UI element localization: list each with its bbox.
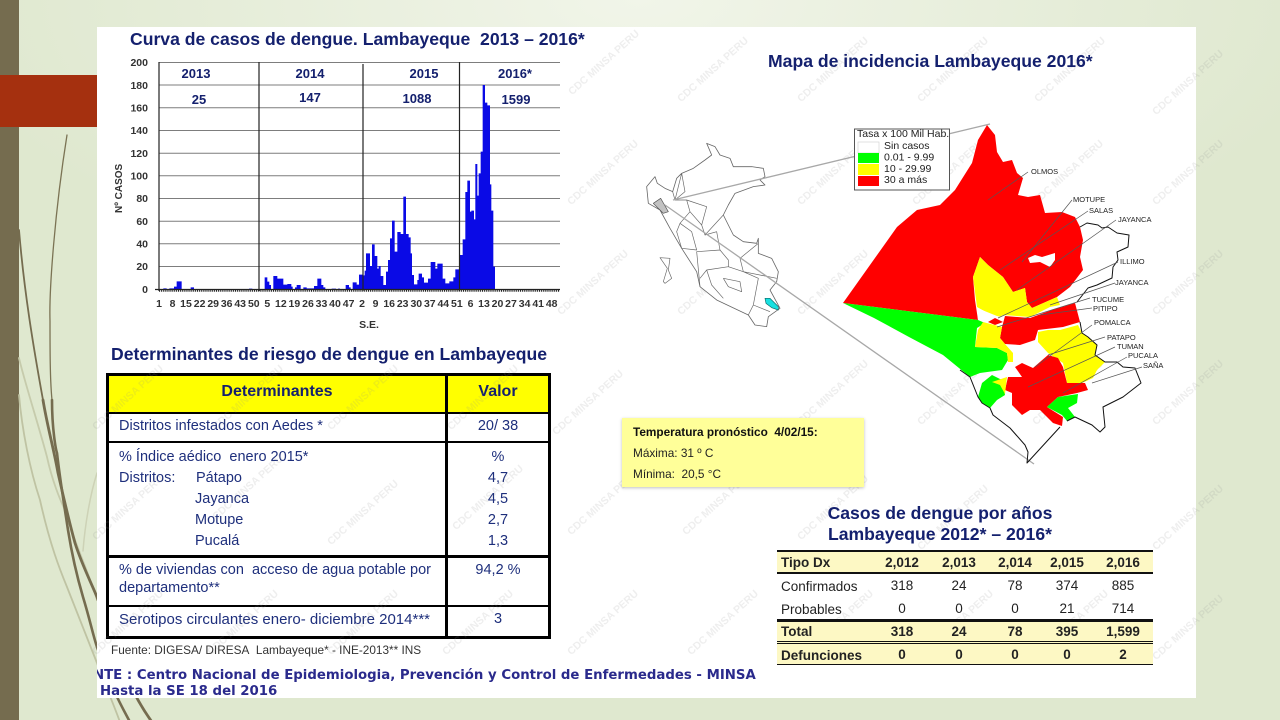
watermarks: CDC MINSA PERU xyxy=(440,588,516,658)
y axis labels: 80 xyxy=(136,193,148,205)
watermarks: CDC MINSA PERU xyxy=(920,588,996,658)
x axis week labels: 43 xyxy=(234,298,246,310)
column 2014: 0 xyxy=(1011,601,1019,616)
column 2014: 78 xyxy=(1007,578,1023,593)
watermarks: CDC MINSA PERU xyxy=(800,588,876,658)
district labels: TUMAN xyxy=(1117,342,1144,351)
x axis week labels: 48 xyxy=(546,298,558,310)
watermarks: CDC MINSA PERU xyxy=(1032,35,1108,105)
watermarks: CDC MINSA PERU xyxy=(450,463,526,533)
column 2015: 21 xyxy=(1059,601,1075,616)
column 2013: 2,013 xyxy=(942,555,976,570)
green south east xyxy=(1047,394,1078,421)
y axis labels: 20 xyxy=(136,261,148,273)
row: indice aedico: % Índice aédico enero 2015* xyxy=(119,449,308,465)
cases table heading: Casos de dengue por años xyxy=(828,503,1052,523)
district labels: MOTUPE xyxy=(1073,195,1105,204)
green coast xyxy=(843,303,1008,377)
watermarks: CDC MINSA PERU xyxy=(445,363,521,433)
column 2014: 78 xyxy=(1007,624,1023,639)
grid lines xyxy=(159,62,560,266)
Lambayeque department map xyxy=(843,125,1142,463)
watermarks: CDC MINSA PERU xyxy=(685,588,761,658)
watermarks: CDC MINSA PERU xyxy=(205,588,281,658)
year labels and totals: 2013 xyxy=(182,66,210,81)
cases table heading: Lambayeque 2012* – 2016* xyxy=(828,524,1052,544)
watermarks: CDC MINSA PERU xyxy=(1150,48,1226,118)
watermarks: CDC MINSA PERU xyxy=(1150,483,1226,553)
district labels: SALAS xyxy=(1089,206,1113,215)
x axis week labels: 33 xyxy=(316,298,327,310)
x axis week labels: 2 xyxy=(359,298,365,310)
values: indice aedico xyxy=(488,449,508,549)
x axis week labels: 34 xyxy=(519,298,531,310)
Lambayeque locator xyxy=(653,198,668,213)
row: agua potable xyxy=(119,562,431,596)
x axis title: S.E. xyxy=(359,319,379,331)
map legend: 0.01 - 9.99 xyxy=(884,152,934,164)
column 2012: 0 xyxy=(898,601,906,616)
column 2012: 318 xyxy=(891,624,913,639)
yellow east xyxy=(1038,325,1105,383)
x axis week labels: 27 xyxy=(505,298,517,310)
Peru locator map xyxy=(647,143,780,327)
column 2015: 0 xyxy=(1063,647,1071,662)
watermarks: CDC MINSA PERU xyxy=(1150,248,1226,318)
watermarks: CDC MINSA PERU xyxy=(915,248,991,318)
yellow north xyxy=(973,257,1060,318)
year labels and totals: 25 xyxy=(192,92,206,107)
map title: Mapa de incidencia Lambayeque 2016* xyxy=(768,51,1093,71)
x axis week labels: 1 xyxy=(156,298,162,310)
column 2016: 885 xyxy=(1112,578,1134,593)
green south west xyxy=(978,375,1005,408)
map legend: Tasa x 100 Mil Hab. xyxy=(857,128,949,140)
watermarks: CDC MINSA PERU xyxy=(1150,593,1226,663)
x axis week labels: 16 xyxy=(383,298,395,310)
source note: Fuente: DIGESA/ DIRESA Lambayeque* - INE-2013** INS xyxy=(111,643,421,657)
x axis week labels xyxy=(156,298,558,310)
row: indice aedico: Jayanca xyxy=(195,491,249,507)
row: indice aedico xyxy=(119,448,308,549)
y axis labels: 180 xyxy=(130,80,148,92)
island outline xyxy=(660,258,672,283)
map legend: Sin casos xyxy=(884,140,930,152)
callout heading: Temperatura pronóstico 4/02/15: xyxy=(633,425,818,439)
x axis week labels: 36 xyxy=(221,298,233,310)
column 2016: 2 xyxy=(1119,647,1127,662)
column 2013 xyxy=(942,555,976,662)
determinants heading: Determinantes de riesgo de dengue en Lambayeque xyxy=(111,344,547,364)
case bars xyxy=(163,85,495,290)
red central xyxy=(1000,303,1080,345)
column 2013: 0 xyxy=(955,601,963,616)
x axis week labels: 40 xyxy=(329,298,341,310)
row labels: Tipo Dx xyxy=(781,555,830,570)
watermarks: CDC MINSA PERU xyxy=(675,248,751,318)
y axis labels: 60 xyxy=(136,216,148,228)
row labels: Probables xyxy=(781,602,842,617)
watermarks: CDC MINSA PERU xyxy=(795,248,871,318)
x axis week labels: 23 xyxy=(397,298,409,310)
column 2013: 24 xyxy=(951,624,967,639)
watermarks: CDC MINSA PERU xyxy=(325,363,401,433)
callout lines xyxy=(665,124,1034,464)
maximum temperature: Máxima: 31 º C xyxy=(633,446,713,460)
red south xyxy=(1005,355,1088,426)
year labels and totals: 1088 xyxy=(403,91,431,106)
yellow south xyxy=(992,377,1007,394)
watermarks: CDC MINSA PERU xyxy=(210,363,286,433)
row: indice aedico: Motupe xyxy=(195,512,243,528)
x axis week labels: 26 xyxy=(302,298,314,310)
district labels: TUCUME xyxy=(1092,295,1124,304)
temperature callout xyxy=(622,418,864,487)
y axis labels xyxy=(130,57,148,296)
value: 20/38: 20/ 38 xyxy=(478,418,518,434)
values: indice aedico: 4,5 xyxy=(488,491,508,507)
row: agua potable: % de viviendas con acceso de agua potable por xyxy=(119,562,431,578)
watermarks: CDC MINSA PERU xyxy=(565,588,641,658)
x axis week labels: 41 xyxy=(532,298,544,310)
column 2012: 0 xyxy=(898,647,906,662)
watermarks: CDC MINSA PERU xyxy=(915,358,991,428)
x axis week labels: 50 xyxy=(248,298,260,310)
watermarks: CDC MINSA PERU xyxy=(795,358,871,428)
left brown band xyxy=(0,0,19,720)
map legend: 10 - 29.99 xyxy=(884,163,931,175)
y axis labels: 160 xyxy=(130,102,148,114)
determinants table xyxy=(106,373,551,639)
red small xyxy=(988,318,1003,325)
district labels xyxy=(1031,167,1163,370)
x axis week labels: 5 xyxy=(264,298,270,310)
x axis week labels: 8 xyxy=(170,298,176,310)
y axis labels: 140 xyxy=(130,125,148,137)
watermarks: CDC MINSA PERU xyxy=(90,363,166,433)
x axis week labels: 44 xyxy=(437,298,449,310)
row labels: Defunciones xyxy=(781,648,862,663)
column 2016: 714 xyxy=(1112,601,1134,616)
column divider xyxy=(445,376,448,636)
column 2016: 1,599 xyxy=(1106,624,1140,639)
map legend: 30 a más xyxy=(884,174,927,186)
column 2014 xyxy=(998,555,1032,662)
white districts xyxy=(1057,217,1129,305)
year labels and totals: 2015 xyxy=(410,66,438,81)
x axis week labels: 47 xyxy=(343,298,355,310)
row divider 3 xyxy=(109,605,548,607)
row: indice aedico: Pucalá xyxy=(195,533,239,549)
footer source xyxy=(97,668,756,698)
y axis labels: 40 xyxy=(136,238,148,250)
y axis labels: 200 xyxy=(130,57,148,69)
district labels: POMALCA xyxy=(1094,318,1131,327)
watermarks: CDC MINSA PERU xyxy=(1030,138,1106,208)
x axis week labels: 9 xyxy=(373,298,379,310)
x axis week labels: 19 xyxy=(289,298,300,310)
minimum temperature: Mínima: 20,5 °C xyxy=(633,467,721,481)
watermarks: CDC MINSA PERU xyxy=(915,483,991,553)
value: 94,2 %: 94,2 % xyxy=(475,562,521,578)
watermarks: CDC MINSA PERU xyxy=(1030,358,1106,428)
map legend xyxy=(854,128,950,190)
column 2016 xyxy=(1106,555,1140,662)
watermarks: CDC MINSA PERU xyxy=(1150,138,1226,208)
column 2015 xyxy=(1050,555,1084,662)
watermarks: CDC MINSA PERU xyxy=(915,35,991,105)
watermarks: CDC MINSA PERU xyxy=(565,468,641,538)
column 2012: 318 xyxy=(891,578,913,593)
watermarks: CDC MINSA PERU xyxy=(795,473,871,543)
row labels: Confirmados xyxy=(781,579,858,594)
white hole xyxy=(1028,253,1055,267)
x axis week labels: 30 xyxy=(410,298,422,310)
watermarks: CDC MINSA PERU xyxy=(90,473,166,543)
column 2013: 24 xyxy=(951,578,967,593)
watermarks: CDC MINSA PERU xyxy=(565,138,641,208)
column 2015: 395 xyxy=(1056,624,1078,639)
column 2015: 2,015 xyxy=(1050,555,1084,570)
x axis week labels: 22 xyxy=(194,298,206,310)
watermarks: CDC MINSA PERU xyxy=(795,138,871,208)
watermarks: CDC MINSA PERU xyxy=(566,28,642,98)
total band xyxy=(777,619,1153,644)
x axis week labels: 37 xyxy=(424,298,436,310)
year labels and totals: 2016* xyxy=(498,66,533,81)
table header xyxy=(109,376,548,414)
row: serotipos: Serotipos circulantes enero- diciembre 2014*** xyxy=(119,611,430,628)
watermarks: CDC MINSA PERU xyxy=(325,588,401,658)
x axis week labels: 12 xyxy=(275,298,287,310)
district labels: SAÑA xyxy=(1143,361,1163,370)
watermarks: CDC MINSA PERU xyxy=(90,588,166,658)
district leader lines xyxy=(988,172,1142,393)
row: agua potable: departamento** xyxy=(119,580,220,596)
row divider 1 xyxy=(109,441,548,443)
cases table heading xyxy=(828,503,1052,544)
district labels: PATAPO xyxy=(1107,333,1136,342)
x axis week labels: 51 xyxy=(451,298,463,310)
x axis week labels: 20 xyxy=(492,298,503,310)
year labels and totals: 1599 xyxy=(502,92,530,107)
x axis week labels: 13 xyxy=(478,298,490,310)
row divider 2 xyxy=(109,555,548,558)
y axis labels: 120 xyxy=(130,148,148,160)
watermarks: CDC MINSA PERU xyxy=(795,35,871,105)
values: indice aedico: 1,3 xyxy=(488,533,508,549)
axes and year dividers xyxy=(155,62,560,291)
column 2014: 0 xyxy=(1011,647,1019,662)
watermarks: CDC MINSA PERU xyxy=(325,478,401,548)
column 2012: 2,012 xyxy=(885,555,919,570)
values: indice aedico: 4,7 xyxy=(488,470,508,486)
watermarks: CDC MINSA PERU xyxy=(675,35,751,105)
cyan locator mark xyxy=(765,298,778,310)
district labels: PUCALA xyxy=(1128,351,1158,360)
header: determinantes: Determinantes xyxy=(221,383,333,400)
column 2013: 0 xyxy=(955,647,963,662)
watermarks: CDC MINSA PERU xyxy=(555,248,631,318)
year labels and totals xyxy=(182,66,533,107)
watermarks: CDC MINSA PERU xyxy=(210,453,286,523)
column 2016: 2,016 xyxy=(1106,555,1140,570)
values: indice aedico: 2,7 xyxy=(488,512,508,528)
yellow coast xyxy=(975,322,1013,362)
header band xyxy=(777,550,1153,574)
row labels xyxy=(781,555,862,663)
district labels: PITIPO xyxy=(1093,304,1118,313)
red accent block xyxy=(0,75,97,127)
y axis labels: 100 xyxy=(130,170,148,182)
district labels: JAYANCA xyxy=(1118,215,1151,224)
district labels: ILLIMO xyxy=(1120,257,1145,266)
values: indice aedico: % xyxy=(492,449,504,465)
row: indice aedico: Distritos: xyxy=(119,470,175,486)
red main district xyxy=(843,125,1083,320)
column 2012 xyxy=(885,555,919,662)
column 2014: 2,014 xyxy=(998,555,1032,570)
cases by year table xyxy=(777,550,1153,665)
watermarks: CDC MINSA PERU xyxy=(1035,588,1111,658)
row: indice aedico: Pátapo xyxy=(196,470,242,486)
row labels: Total xyxy=(781,624,812,639)
column 2015: 374 xyxy=(1056,578,1078,593)
deaths band xyxy=(777,644,1153,665)
watermarks: CDC MINSA PERU xyxy=(1030,248,1106,318)
district labels: JAYANCA xyxy=(1115,278,1148,287)
watermarks: CDC MINSA PERU xyxy=(680,468,756,538)
white central xyxy=(977,308,1005,328)
watermarks: CDC MINSA PERU xyxy=(1150,358,1226,428)
x axis week labels: 29 xyxy=(207,298,219,310)
value: 3: 3 xyxy=(494,611,502,627)
y axis title: Nº CASOS xyxy=(114,163,125,213)
x axis week labels: 6 xyxy=(468,298,474,310)
header: valor: Valor xyxy=(478,383,518,400)
x axis week labels: 15 xyxy=(180,298,192,310)
row: distritos infestados: Distritos infestados con Aedes * xyxy=(119,418,323,434)
district labels: OLMOS xyxy=(1031,167,1058,176)
watermarks: CDC MINSA PERU xyxy=(910,138,986,208)
year labels and totals: 2014 xyxy=(296,66,325,81)
watermarks: CDC MINSA PERU xyxy=(550,368,626,438)
black outer boundary xyxy=(960,223,1141,463)
y axis labels: 0 xyxy=(142,284,148,296)
year labels and totals: 147 xyxy=(299,90,321,105)
chart title: Curva de casos de dengue. Lambayeque 2013 – 2016* xyxy=(130,29,585,49)
